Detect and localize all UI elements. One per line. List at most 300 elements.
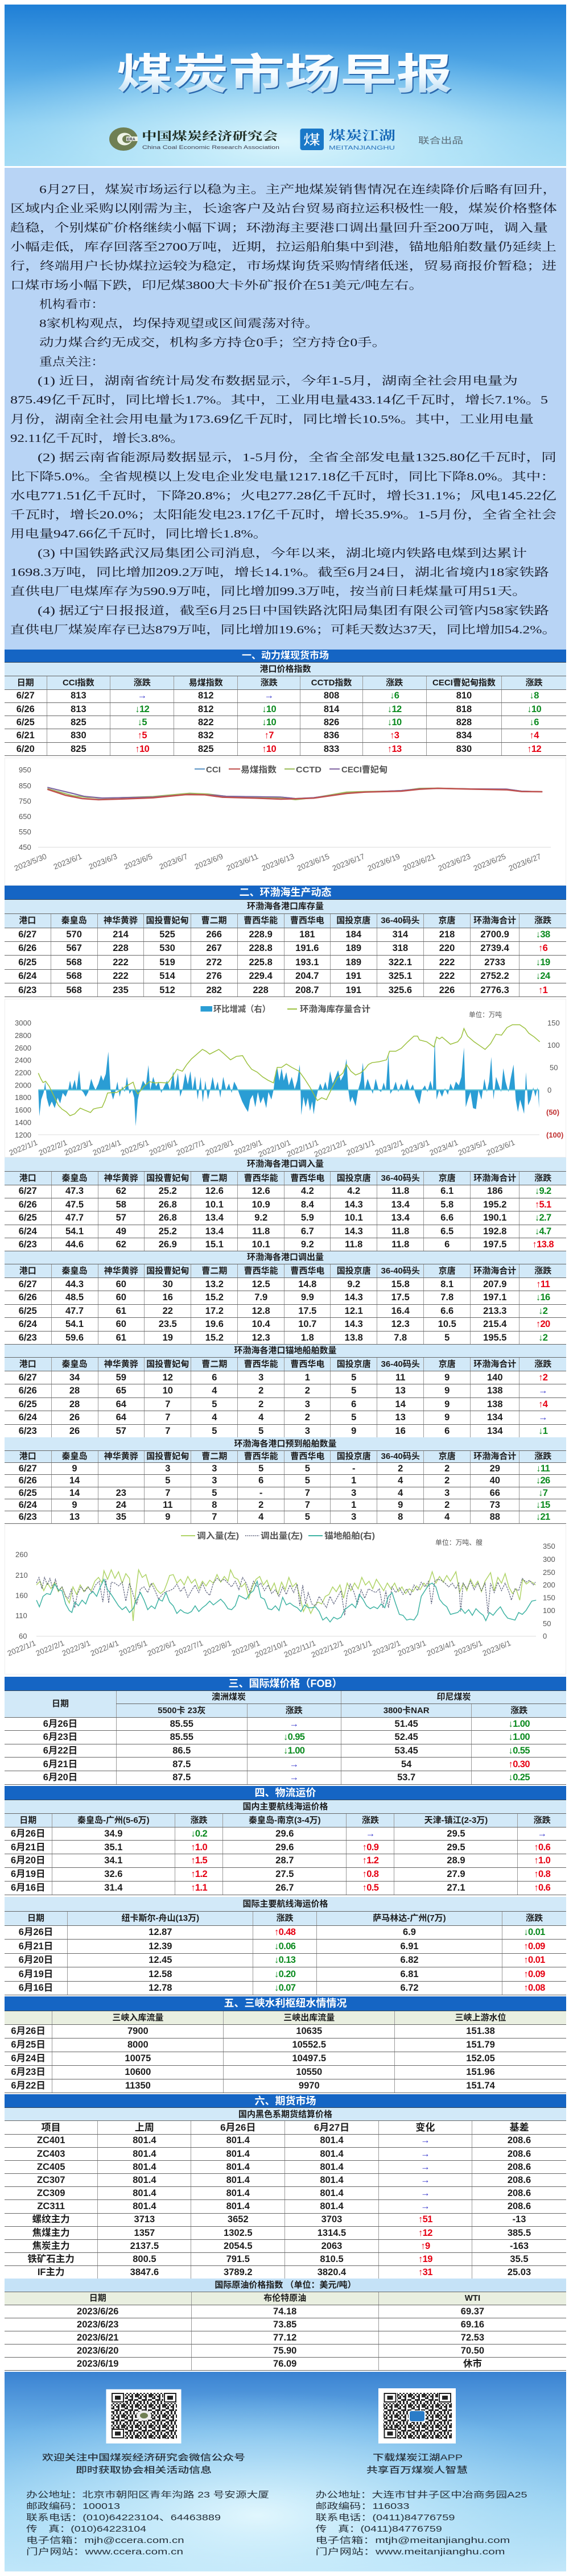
panel: domestic freight table: ↑1.2 xyxy=(362,1855,378,1866)
panel: futures market table: → xyxy=(420,2201,430,2211)
panel: Bohai Rim port inventory table: 204.7 xyxy=(295,971,319,981)
panel: international freight table: 6.81 xyxy=(400,1969,419,1979)
text: Meitan Jianghu contact details xyxy=(315,2490,527,2557)
panel: international freight table: 12.87 xyxy=(149,1927,172,1937)
panel: port inflow table: 25.2 xyxy=(159,1226,177,1237)
text: app download prompt: 共享百万煤炭人智慧 xyxy=(366,2465,468,2475)
text: association contact details: 联系电话：(010)64223104、64463889 xyxy=(26,2513,221,2523)
panel: thermal coal spot market table: 6/21 xyxy=(17,730,35,741)
table header row: 日期 xyxy=(17,678,34,687)
panel: Three Gorges water table: 152.05 xyxy=(466,2053,495,2064)
panel: port outflow table: 61 xyxy=(116,1306,126,1316)
table header row: 三峡入库流量 xyxy=(112,2012,163,2023)
right y axis labels: 100 xyxy=(547,1041,560,1049)
panel: international freight table: 6月19日 xyxy=(19,1969,53,1979)
panel: Bohai Rim port inventory table: 314 xyxy=(393,929,408,940)
panel: expected arrivals table: 6/26 xyxy=(19,1475,37,1486)
panel: international coal price table: ↓1.00 xyxy=(509,1719,530,1729)
panel: Three Gorges water table: 11350 xyxy=(125,2081,151,2091)
panel: domestic freight table: → xyxy=(366,1829,375,1839)
left y axis labels: 2600 xyxy=(15,1044,31,1052)
panel: expected arrivals table: 7 xyxy=(212,1512,217,1522)
table header row: 涨跌 xyxy=(134,678,151,687)
panel: expected arrivals table: - xyxy=(352,1463,355,1474)
panel: port inflow table: 6.7 xyxy=(301,1226,314,1237)
table header row: 项目 xyxy=(42,2122,61,2133)
text: app download prompt xyxy=(366,2453,468,2475)
table header row: 涨跌 xyxy=(534,1816,551,1825)
panel: anchorage ship count table: 环渤海各港口锚地船舶数量 xyxy=(234,1346,337,1355)
panel: port outflow table: 15.2 xyxy=(205,1292,224,1303)
panel: Bohai Rim port inventory table: 222 xyxy=(439,957,455,967)
left y axis labels xyxy=(15,1019,31,1139)
x axis: 2022/12/1 xyxy=(310,1639,345,1659)
panel: port outflow table: 19.6 xyxy=(205,1319,224,1329)
panel: domestic freight table: ↑0.8 xyxy=(534,1869,550,1879)
panel: crude oil price table: 76.09 xyxy=(273,2359,296,2369)
table header row: 环渤海合计 xyxy=(473,916,516,925)
panel: Bohai Rim port inventory table: 530 xyxy=(159,943,175,953)
panel: domestic freight table: 四、物流运价 xyxy=(255,1787,316,1798)
x axis: 2023/6/1 xyxy=(485,1138,516,1157)
panel: expected arrivals table: 3 xyxy=(444,1488,450,1498)
panel: domestic freight table: ↑0.6 xyxy=(534,1842,550,1853)
panel: anchorage ship count table: 140 xyxy=(487,1372,503,1383)
panel: port outflow table: 60 xyxy=(116,1292,126,1303)
table header row: 环渤海合计 xyxy=(473,1173,516,1183)
table header row: 6月26日 xyxy=(220,2122,255,2133)
panel: expected arrivals table: 23 xyxy=(116,1488,126,1498)
panel: anchorage ship count table: 6/23 xyxy=(19,1425,37,1436)
x axis: 2022/6/1 xyxy=(146,1639,177,1657)
panel: Bohai Rim port inventory table: 2752.2 xyxy=(480,971,509,981)
text: key focus: (1) 近日，湖南省统计局发布数据显示，今年1-5月，湖南全社会用电量为 xyxy=(38,374,518,387)
title: 煤炭市场早报 xyxy=(117,51,452,98)
table header row: 日期 xyxy=(27,1913,44,1923)
panel: port outflow table: 6/25 xyxy=(19,1306,37,1316)
table header row: 36-40码头 xyxy=(381,916,420,925)
table header row: 国投京唐 xyxy=(337,1173,371,1183)
panel: international coal price table: ↓0.95 xyxy=(283,1732,304,1742)
panel: crude oil price table: 70.50 xyxy=(461,2346,484,2356)
panel: expected arrivals table: 7 xyxy=(165,1488,170,1498)
panel: Bohai Rim port inventory table: 568 xyxy=(66,971,82,981)
panel: port inflow table: 62 xyxy=(116,1239,126,1250)
panel: port inflow table: 13.4 xyxy=(391,1200,410,1210)
table header row: 国投曹妃甸 xyxy=(146,1452,189,1461)
table header row: 36-40码头 xyxy=(381,1173,420,1183)
x axis: 2022/9/1 xyxy=(230,1639,261,1657)
table header row: 秦皇岛 xyxy=(61,1359,88,1369)
y axis labels xyxy=(19,766,31,851)
panel: thermal coal spot market table: ↓12 xyxy=(135,704,149,714)
x axis: 2023/6/23 xyxy=(437,852,472,873)
panel: thermal coal spot market table: ↑4 xyxy=(530,730,539,741)
panel: Bohai Rim port inventory table: 191.6 xyxy=(295,943,319,953)
panel: expected arrivals table: 9 xyxy=(398,1500,403,1510)
combo chart: Bohai Rim inventory and daily change xyxy=(5,999,566,1157)
panel: international coal price table: 三、国际煤价格（FOB） xyxy=(229,1678,343,1689)
panel: Bohai Rim port inventory table: 218 xyxy=(439,929,455,940)
panel: futures market table: 1357 xyxy=(134,2228,155,2238)
text: market overview xyxy=(10,183,557,292)
x axis: 2023/6/3 xyxy=(88,852,118,871)
chart legend xyxy=(195,764,387,775)
panel: port outflow table: 215.4 xyxy=(483,1319,506,1329)
right y axis labels: 0 xyxy=(547,1086,551,1094)
panel: anchorage ship count table: 64 xyxy=(116,1412,126,1423)
table header row: 涨跌 xyxy=(261,678,278,687)
left y axis labels: 3000 xyxy=(15,1019,31,1027)
panel: futures market table: 3847.6 xyxy=(130,2267,159,2277)
panel: futures market table: 801.4 xyxy=(320,2162,344,2172)
panel: thermal coal spot market table: 808 xyxy=(324,690,339,701)
panel: international coal price table: 涨跌 xyxy=(286,1706,303,1715)
panel: Bohai Rim port inventory table: 235 xyxy=(113,985,129,995)
panel: thermal coal spot market table: 833 xyxy=(324,744,339,754)
panel: anchorage ship count table: 134 xyxy=(487,1425,503,1436)
panel: thermal coal spot market table: ↑5 xyxy=(138,730,147,741)
panel: crude oil price table xyxy=(5,2279,566,2371)
panel: anchorage ship count table: 13 xyxy=(395,1386,406,1396)
panel: Three Gorges water table: 151.79 xyxy=(466,2040,495,2050)
table header row: 国投京唐 xyxy=(337,1359,371,1369)
panel: thermal coal spot market table: ↑10 xyxy=(262,744,276,754)
panel: port inflow table: 190.1 xyxy=(483,1213,506,1223)
y axis labels: 650 xyxy=(19,812,31,821)
table header row: 36-40码头 xyxy=(381,1266,420,1276)
panel: Bohai Rim port inventory table: 266 xyxy=(206,929,222,940)
panel: international freight table: 6.82 xyxy=(400,1955,419,1965)
panel: port outflow table: 17.5 xyxy=(391,1292,410,1303)
panel: anchorage ship count table: 26 xyxy=(69,1412,80,1423)
right y axis labels: 250 xyxy=(543,1568,555,1577)
table header row: 国投京唐 xyxy=(336,916,370,925)
right y axis labels: 50 xyxy=(550,1064,558,1072)
left y axis labels: 60 xyxy=(19,1632,27,1640)
panel: Bohai Rim port inventory table: 214 xyxy=(113,929,129,940)
panel: expected arrivals table: 11 xyxy=(163,1500,173,1510)
panel: port outflow table: 16.4 xyxy=(391,1306,410,1316)
panel: expected arrivals table: 1 xyxy=(351,1475,356,1486)
right y axis labels xyxy=(546,1019,563,1139)
x axis: 2023/6/13 xyxy=(261,852,295,873)
text: WeChat follow prompt: 欢迎关注中国煤炭经济研究会微信公众号 xyxy=(42,2453,245,2463)
text: institutional views: 机构看市： xyxy=(39,297,104,311)
x axis: 2022/5/1 xyxy=(118,1639,149,1657)
panel: port outflow table: ↓16 xyxy=(536,1292,550,1303)
panel: expected arrivals table: 4 xyxy=(258,1512,263,1522)
panel: futures market table: 35.5 xyxy=(510,2254,529,2264)
panel: anchorage ship count table: 4 xyxy=(212,1412,217,1423)
panel: expected arrivals table: 6/25 xyxy=(19,1488,37,1498)
panel: domestic freight table: ↑0.8 xyxy=(362,1869,378,1879)
panel: anchorage ship count table: 65 xyxy=(116,1386,126,1396)
table header row: 涨跌 xyxy=(526,1913,543,1923)
panel: domestic freight table: 6月19日 xyxy=(11,1869,46,1879)
left y axis labels: 1800 xyxy=(15,1093,31,1102)
panel: Bohai Rim port inventory table: 2733 xyxy=(484,957,505,967)
panel: international coal price table: 86.5 xyxy=(172,1746,191,1756)
panel: crude oil price table: 2023/6/21 xyxy=(77,2333,118,2343)
panel: port outflow table: 环渤海各港口调出量 xyxy=(247,1252,324,1262)
panel: port inflow table: 6/24 xyxy=(19,1226,37,1237)
panel: port outflow table: 59.6 xyxy=(65,1332,84,1342)
logo: Meitan Jianghu: MEITANJIANGHU xyxy=(329,144,395,151)
price index lines xyxy=(47,787,542,800)
panel: international freight table: 6月21日 xyxy=(19,1941,53,1951)
x axis: 2022/4/1 xyxy=(89,1639,120,1657)
panel: port inflow table: 12.6 xyxy=(252,1186,270,1196)
panel: expected arrivals table: 2 xyxy=(398,1463,403,1474)
panel: anchorage ship count table: 2 xyxy=(258,1399,263,1409)
panel: thermal coal spot market table: 6/25 xyxy=(17,717,35,727)
panel: anchorage ship count table: 6/25 xyxy=(19,1399,37,1409)
panel: domestic freight table: 27.5 xyxy=(275,1869,294,1879)
left y axis labels xyxy=(15,1550,28,1640)
panel: futures market table: ↑31 xyxy=(418,2267,432,2277)
x axis: 2023/6/7 xyxy=(158,852,189,871)
panel: domestic freight table: 29.6 xyxy=(275,1842,294,1853)
sub heading: port inventory: 环渤海各港口库存量 xyxy=(247,902,324,911)
x axis: 2023/6/19 xyxy=(366,852,401,873)
text: WeChat follow prompt: 即时获取协会相关活动信息 xyxy=(76,2465,212,2475)
text: market overview: 口煤市场小幅下跌，印尼煤3800大卡外矿报价在51美元/吨左右。 xyxy=(10,279,423,292)
panel: Bohai Rim port inventory table: 282 xyxy=(206,985,222,995)
panel: expected arrivals table: ↓21 xyxy=(536,1512,550,1522)
panel: thermal coal spot market table: ↑7 xyxy=(265,730,274,741)
panel: domestic freight table: 27.9 xyxy=(447,1869,465,1879)
panel: international coal price table: 51.45 xyxy=(395,1719,418,1729)
panel: thermal coal spot market table: 6/26 xyxy=(17,704,35,714)
panel: thermal coal spot market table: 825 xyxy=(71,717,86,727)
x axis: 2022/1/1 xyxy=(6,1639,37,1657)
panel: futures market table: 208.6 xyxy=(508,2175,531,2185)
panel: Bohai Rim port inventory table: 228.8 xyxy=(249,943,273,953)
panel: international freight table: ↑0.08 xyxy=(523,1983,545,1993)
panel: anchorage ship count table: 1 xyxy=(305,1372,310,1383)
panel: Three Gorges water table: 6月24日 xyxy=(11,2053,46,2064)
y axis labels: 950 xyxy=(19,766,31,774)
panel: port outflow table: 12.3 xyxy=(391,1319,410,1329)
table header row: 曹西华能 xyxy=(244,1173,278,1183)
panel: futures market table: -163 xyxy=(510,2241,529,2251)
panel: international freight table: 国际主要航线海运价格 xyxy=(242,1899,328,1909)
table header row: 神华黄骅 xyxy=(104,1452,138,1461)
x axis: 2023/6/1 xyxy=(52,852,83,871)
table header row: 秦皇岛 xyxy=(61,916,87,925)
panel: expected arrivals table: 73 xyxy=(490,1500,500,1510)
panel: port outflow table: 12.3 xyxy=(252,1332,270,1342)
table header row: 涨跌 xyxy=(277,1913,294,1923)
panel: anchorage ship count table: 3 xyxy=(305,1399,310,1409)
panel: port outflow table xyxy=(5,1251,566,1345)
panel: port outflow table: 16 xyxy=(163,1292,173,1303)
table header row: 环渤海合计 xyxy=(473,1359,516,1369)
panel: domestic freight table xyxy=(5,1786,566,1895)
panel: futures market table: 3789.2 xyxy=(224,2267,253,2277)
panel: futures market table: ↑51 xyxy=(418,2214,432,2224)
panel: international coal price table: 54 xyxy=(401,1759,411,1769)
x axis: 2023/6/1 xyxy=(481,1639,512,1657)
panel: futures market table: → xyxy=(420,2149,430,2159)
panel: Bohai Rim port inventory table xyxy=(5,886,566,997)
panel: port outflow table: 207.9 xyxy=(483,1279,506,1289)
panel: Three Gorges water table: 10550 xyxy=(296,2067,322,2077)
panel: expected arrivals table: 24 xyxy=(116,1500,126,1510)
panel: port inflow table: 195.2 xyxy=(483,1200,506,1210)
table header row xyxy=(5,2011,566,2024)
x axis: 2022/2/1 xyxy=(35,1639,65,1657)
panel: Bohai Rim port inventory table: 228 xyxy=(113,943,129,953)
panel: port outflow table: 12.1 xyxy=(345,1306,363,1316)
panel: port inflow table: 62 xyxy=(116,1186,126,1196)
panel: anchorage ship count table: 7 xyxy=(165,1399,170,1409)
panel: expected arrivals table: 3 xyxy=(212,1463,217,1474)
QR code: China Coal Economic Research Association xyxy=(106,2389,181,2443)
panel: Three Gorges water table xyxy=(5,1996,566,2093)
chart legend: 单位：万吨 xyxy=(469,1010,502,1019)
table header row: 天津-镇江(2-3万) xyxy=(424,1816,488,1825)
x axis: 2023/6/21 xyxy=(402,852,436,873)
right y axis labels xyxy=(543,1542,555,1640)
table header row xyxy=(5,1814,566,1827)
text: key focus xyxy=(10,355,556,636)
table header row: 环渤海合计 xyxy=(473,1266,516,1276)
panel: port inflow table: 6.5 xyxy=(440,1226,453,1237)
line chart: port price indices xyxy=(5,758,566,886)
panel: anchorage ship count table: 9 xyxy=(444,1412,450,1423)
table header row: 基差 xyxy=(509,2122,529,2133)
panel: anchorage ship count table: 9 xyxy=(444,1386,450,1396)
panel: anchorage ship count table: 4 xyxy=(212,1386,217,1396)
panel: Bohai Rim port inventory table: 318 xyxy=(393,943,408,953)
panel: port outflow table: 30 xyxy=(163,1279,173,1289)
sub heading: domestic routes: 国内主要航线海运价格 xyxy=(242,1802,328,1811)
panel: anchorage ship count table: 6/24 xyxy=(19,1412,37,1423)
panel: futures market table: 801.4 xyxy=(133,2175,156,2185)
text: WeChat follow prompt xyxy=(42,2453,245,2475)
text: key focus: 1698.3万吨，同比增加209.2万吨，增长14.1%。截至6月24日，湖北省境内18家铁路 xyxy=(10,565,549,579)
panel: thermal coal spot market table: 822 xyxy=(198,717,214,727)
text: Meitan Jianghu contact details: 联系电话：(0411)84776759 xyxy=(315,2513,455,2523)
panel: domestic freight table: 31.4 xyxy=(104,1883,122,1893)
panel: port inflow table: 49 xyxy=(116,1226,126,1237)
panel: anchorage ship count table: 16 xyxy=(395,1425,406,1436)
panel: port inflow table: ↑5.1 xyxy=(535,1200,551,1210)
panel: port outflow table: 15.2 xyxy=(205,1332,224,1342)
table header row: 涨跌 xyxy=(534,916,551,925)
panel: domestic freight table: 6月20日 xyxy=(11,1855,46,1866)
table header row: 涨跌 xyxy=(534,1359,551,1369)
panel: domestic freight table: 29.6 xyxy=(275,1829,294,1839)
panel: expected arrivals table: 7 xyxy=(305,1488,310,1498)
panel: futures market table: 焦煤主力 xyxy=(32,2228,70,2238)
panel: Three Gorges water table: 9970 xyxy=(299,2081,320,2091)
table header row: 6月27日 xyxy=(314,2122,349,2133)
chart legend xyxy=(181,1531,483,1547)
x axis: 2023/1/1 xyxy=(345,1138,376,1157)
logo: Meitan Jianghu: 煤 xyxy=(303,133,320,148)
panel: port outflow table: 13.2 xyxy=(205,1279,224,1289)
table header row: CCTD指数 xyxy=(311,678,352,687)
panel: port outflow table: 22 xyxy=(163,1306,173,1316)
panel: futures market table: 3713 xyxy=(134,2214,155,2224)
panel: domestic freight table: ↑1.0 xyxy=(534,1855,550,1866)
panel: port outflow table: 197.1 xyxy=(483,1292,506,1303)
chart legend: CCTD xyxy=(296,765,321,775)
panel: thermal coal spot market table xyxy=(5,650,566,756)
panel: crude oil price table: 72.53 xyxy=(461,2333,484,2343)
panel: futures market table: 801.4 xyxy=(133,2162,156,2172)
panel: thermal coal spot market table: 825 xyxy=(71,744,86,754)
panel: port outflow table: 6/23 xyxy=(19,1332,37,1342)
panel: domestic freight table: ↑1.1 xyxy=(191,1883,207,1893)
panel: port outflow table: ↓2 xyxy=(538,1332,547,1342)
panel: thermal coal spot market table: 836 xyxy=(324,730,339,741)
panel: anchorage ship count table: 10 xyxy=(163,1386,173,1396)
text: Meitan Jianghu contact details: 电子信箱：mtjh@meitanjianghu.com xyxy=(315,2536,510,2545)
table header row: 曹西华电 xyxy=(290,1452,324,1461)
panel: thermal coal spot market table: 834 xyxy=(456,730,472,741)
chart legend: 锚地船舶(右) xyxy=(324,1531,375,1541)
panel: expected arrivals table: 14 xyxy=(69,1488,80,1498)
panel: Bohai Rim port inventory table: 568 xyxy=(66,957,82,967)
panel: thermal coal spot market table: 812 xyxy=(198,690,214,701)
panel: domestic freight table: ↑0.5 xyxy=(362,1883,378,1893)
table header row: 京唐 xyxy=(439,1173,456,1183)
panel: international freight table: 6.9 xyxy=(403,1927,416,1937)
table header row: 萨马林达-广州(7万) xyxy=(373,1913,446,1923)
chart legend: 环渤海库存量合计 xyxy=(300,1004,370,1014)
panel: port outflow table: ↑11 xyxy=(536,1279,550,1289)
table header row xyxy=(5,1451,566,1462)
x axis: 2023/3/1 xyxy=(400,1138,431,1157)
panel: port inflow table: 8.4 xyxy=(301,1200,314,1210)
text: Meitan Jianghu contact details: 门户网站：www.meitanjianghu.com xyxy=(315,2547,505,2557)
panel: anchorage ship count table: 57 xyxy=(116,1425,126,1436)
panel: futures market table: ZC309 xyxy=(37,2188,65,2198)
panel: Three Gorges water table: 8000 xyxy=(127,2040,149,2050)
panel: Three Gorges water table: 151.74 xyxy=(466,2081,495,2091)
panel: port inflow table xyxy=(5,1157,566,1251)
panel: port inflow table: 13.4 xyxy=(205,1226,224,1237)
panel: port outflow table: 6.6 xyxy=(440,1306,453,1316)
panel: port outflow table: 13.8 xyxy=(345,1332,363,1342)
panel: futures market table: 801.4 xyxy=(226,2149,250,2159)
table header row: 日期 xyxy=(89,2293,106,2303)
panel: anchorage ship count table: ↑2 xyxy=(538,1372,547,1383)
panel: international coal price table: 6月23日 xyxy=(43,1732,77,1742)
panel: anchorage ship count table: 134 xyxy=(487,1412,503,1423)
text: association contact details: 办公地址：北京市朝阳区青年沟路 23 号安源大厦 xyxy=(26,2490,269,2500)
panel: domestic freight table: → xyxy=(537,1829,547,1839)
panel: futures market table: 801.4 xyxy=(320,2188,344,2198)
panel: crude oil price table: 国际原油价格指数 （单位：美元/吨） xyxy=(215,2280,356,2290)
table header row: 国投曹妃甸 xyxy=(146,1173,189,1183)
panel: expected arrivals table: 5 xyxy=(305,1512,310,1522)
right y axis labels: 300 xyxy=(543,1555,555,1564)
x axis: 2022/11/1 xyxy=(283,1639,317,1659)
panel: port outflow table: 12.5 xyxy=(252,1279,270,1289)
panel: port inflow table: 10.1 xyxy=(252,1239,270,1250)
panel: Bohai Rim port inventory table: 189 xyxy=(346,957,361,967)
panel: Bohai Rim port inventory table: 6/26 xyxy=(18,943,36,953)
panel: international freight table: 6月16日 xyxy=(19,1983,53,1993)
panel: anchorage ship count table: 6 xyxy=(351,1399,356,1409)
table header row: 国投曹妃甸 xyxy=(146,916,189,925)
text: market overview: 行，终端用户长协煤拉运较为稳定，市场煤询货采购情绪低迷，贸易商报价暂稳；进 xyxy=(10,259,556,272)
